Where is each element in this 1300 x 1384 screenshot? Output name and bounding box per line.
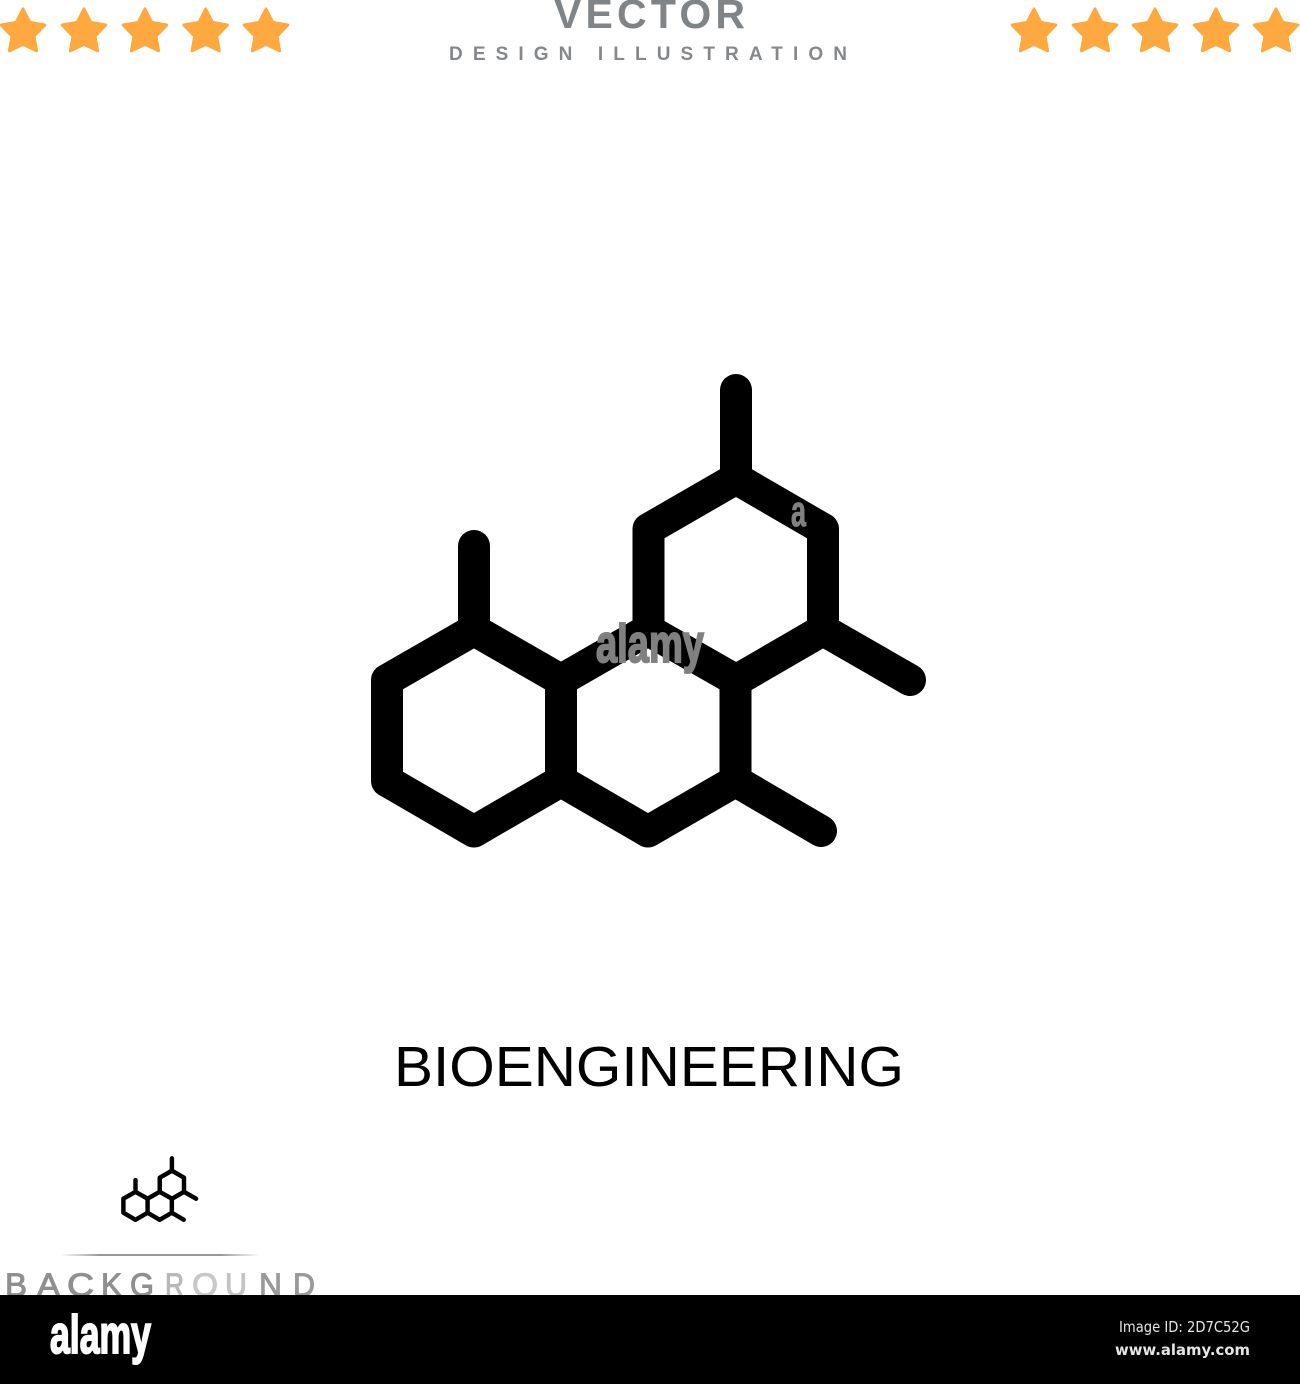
footer: image id: Image ID: 2D7C52G xyxy=(1119,1318,1250,1336)
footer: website: www.alamy.com xyxy=(1115,1341,1250,1359)
label: background xyxy=(5,1267,315,1303)
watermark: alamy over icon: alamy xyxy=(596,614,704,674)
label: background: U xyxy=(225,1267,247,1303)
footer bar xyxy=(0,1295,1300,1384)
icon: small molecule xyxy=(123,1158,196,1220)
title: bioengineering: BIOENGINEERING xyxy=(394,1035,904,1099)
label: background: N xyxy=(259,1267,282,1303)
footer logo: alamy: alamy xyxy=(50,1305,151,1365)
watermark: letter a: a xyxy=(791,487,806,536)
label: background: A xyxy=(37,1267,61,1303)
icon: large bioengineering molecule xyxy=(387,390,910,832)
label: background: C xyxy=(67,1267,94,1303)
header: design illustration: DESIGN ILLUSTRATION xyxy=(449,44,847,65)
label: background: B xyxy=(5,1267,27,1303)
label: background: G xyxy=(130,1267,154,1303)
right rating stars xyxy=(1012,9,1298,51)
label: background: K xyxy=(101,1267,122,1303)
label: background: D xyxy=(293,1267,315,1303)
label: background: R xyxy=(165,1267,184,1303)
label: background: O xyxy=(192,1267,218,1303)
divider line xyxy=(60,1254,260,1256)
left rating stars xyxy=(1,9,288,51)
